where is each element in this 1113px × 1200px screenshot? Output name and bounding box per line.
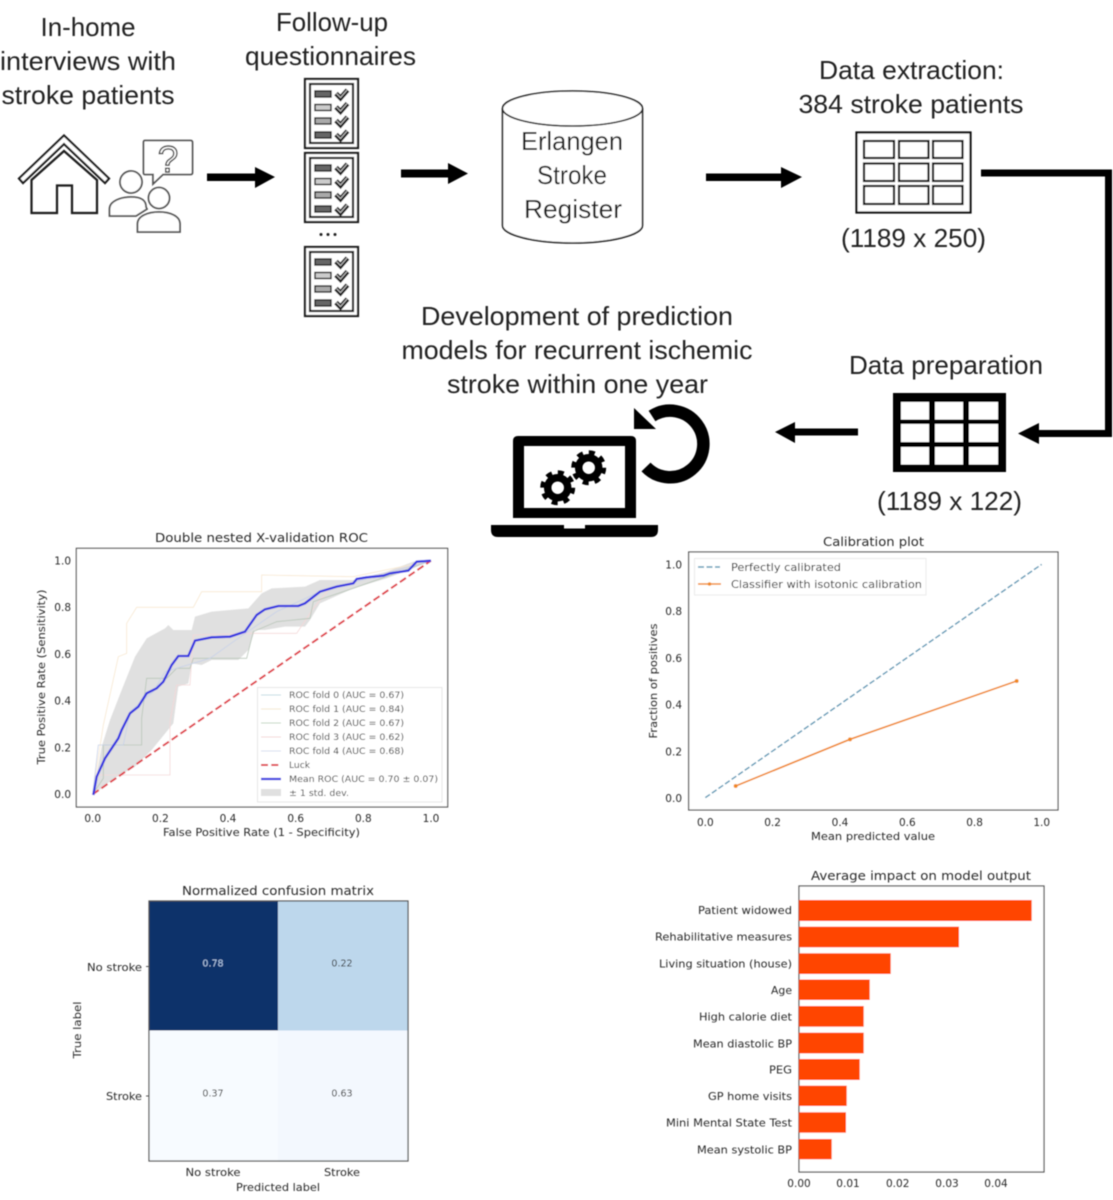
calibration y tick labels: 0.8 [665,606,682,618]
ROC x tick labels: 1.0 [423,813,439,825]
confusion matrix cells: 0.63 [331,1088,353,1100]
confusion matrix cells [149,901,408,1161]
feature labels: Mini Mental State Test [666,1118,792,1130]
feature labels: GP home visits [708,1091,792,1103]
ROC plot area [76,548,448,807]
chart title: confusion matrix: Normalized confusion matrix [182,884,374,898]
bars x tick labels: 0.02 [886,1178,909,1190]
calibration y axis label: Fraction of positives [648,624,660,738]
heading: in-home interviews: interviews with [0,46,176,76]
calibration x tick labels [697,817,1050,829]
chart title: calibration: Calibration plot [823,535,924,549]
feature labels: Rehabilitative measures [655,932,792,944]
ROC x tick labels: 0.6 [287,813,304,825]
feature labels: Age [771,985,792,997]
heading: data preparation: Data preparation [849,350,1043,380]
heading: development of prediction models: Development of prediction [421,301,733,331]
feature labels: Living situation (house) [659,958,792,970]
perfectly calibrated line [705,564,1042,798]
calibration y tick labels [665,560,682,805]
heading: data extraction: 384 stroke patients [798,89,1024,119]
calibration x tick labels: 1.0 [1033,817,1050,829]
heading: follow-up questionnaires [245,7,416,71]
heading: follow-up questionnaires: questionnaires [245,41,416,71]
icon: Erlangen Stroke Register database: Erlangen [521,126,623,156]
icon: gear large [574,453,604,483]
ROC legend: ROC fold 4 (AUC = 0.68) [289,747,404,757]
bars x tick labels: 0.00 [787,1178,811,1190]
calibration y tick labels: 0.4 [665,700,682,712]
std dev band [93,561,431,795]
ROC legend: Mean ROC (AUC = 0.70 ± 0.07) [289,775,438,785]
bars x tick labels: 0.04 [984,1178,1008,1190]
icon: Erlangen Stroke Register database: Register [524,194,622,224]
confusion x tick labels: No stroke [186,1167,240,1179]
feature labels: Patient widowed [698,905,792,917]
chart: ROC curve [36,531,448,839]
bars x tick labels: 0.03 [935,1178,959,1190]
calibration y tick labels: 0.6 [665,653,682,665]
bars x tick labels: 0.01 [836,1178,860,1190]
confusion matrix cells: 0.22 [331,958,353,970]
arrow: interviews to questionnaires [207,167,275,188]
icon: house [19,136,109,213]
ROC legend: Luck [289,761,310,771]
heading: development of prediction models: models for recurrent ischemic [402,335,752,365]
bars frame [799,886,1044,1172]
arrow: preparation to modelling [775,422,858,443]
heading: data extraction: Data extraction: [819,55,1004,85]
ROC x tick labels: 0.2 [152,813,169,825]
ROC y tick labels: 0.6 [54,649,71,661]
feature labels [655,905,792,1156]
heading: follow-up questionnaires: Follow-up [276,7,388,37]
ROC y tick labels: 1.0 [54,556,71,568]
ROC legend: ROC fold 3 (AUC = 0.62) [289,733,404,743]
feature labels: High calorie diet [699,1012,792,1024]
calibration y tick labels: 0.0 [665,793,682,805]
ROC y tick labels: 0.4 [54,696,71,708]
icon: circular iteration arrow [634,408,703,477]
confusion y tick labels [87,962,149,1103]
chart: feature importance bars [655,869,1044,1190]
heading: development of prediction models: stroke within one year [447,369,708,399]
ROC y tick labels: 0.2 [54,742,71,754]
confusion x axis label: Predicted label [236,1182,320,1194]
arrow: register to data extraction [706,167,802,188]
ROC x axis label: False Positive Rate (1 - Specificity) [163,827,360,839]
arrow: extraction to preparation [981,170,1112,444]
label: raw data dimensions: (1189 x 250) [841,223,986,253]
ROC x tick labels [84,813,439,825]
bars x tick labels [787,1178,1008,1190]
confusion matrix cells: 0.78 [202,958,224,970]
workflow diagram [0,7,1112,537]
chart: confusion matrix [72,884,408,1194]
bars [799,900,1032,1159]
chart: calibration plot [648,535,1058,843]
ROC x tick labels: 0.8 [355,813,372,825]
heading: in-home interviews [0,12,176,110]
ROC legend: ROC fold 0 (AUC = 0.67) [289,691,404,701]
heading: in-home interviews: In-home [40,12,136,42]
chart title: average impact: Average impact on model output [811,869,1031,883]
label: prepared data dimensions: (1189 x 122) [877,486,1022,516]
icon: questionnaire stack [305,79,358,316]
confusion matrix cells: 0.37 [202,1088,224,1100]
confusion x tick labels [186,1167,360,1179]
ROC y axis label: True Positive Rate (Sensitivity) [36,590,48,766]
isotonic calibration line [734,679,1019,788]
luck diagonal [93,561,431,794]
icon: laptop with gears [491,436,658,537]
fold curves [93,561,431,794]
calibration plot area [689,552,1058,810]
icon: gear small [543,473,573,503]
calibration y tick labels: 0.2 [665,746,682,758]
calibration x tick labels: 0.0 [697,817,714,829]
mean ROC curve [93,561,431,795]
ROC legend: ROC fold 1 (AUC = 0.84) [289,705,404,715]
icon: raw data table [856,132,970,212]
calibration x tick labels: 0.2 [764,817,781,829]
ROC legend [258,688,442,802]
arrow: questionnaires to register [401,163,468,184]
ROC legend: ROC fold 2 (AUC = 0.67) [289,719,404,729]
confusion y tick labels: Stroke [106,1091,142,1103]
ROC legend: ± 1 std. dev. [289,789,349,799]
confusion y tick labels: No stroke [87,962,142,974]
heading: in-home interviews: stroke patients [2,80,174,110]
calibration legend: Classifier with isotonic calibration [731,579,922,591]
calibration legend: Perfectly calibrated [731,562,841,574]
icon: prepared data table [893,393,1006,472]
heading: data extraction [798,55,1024,119]
feature labels: Mean diastolic BP [693,1038,792,1050]
feature labels: PEG [769,1064,792,1076]
ROC x tick labels: 0.4 [220,813,237,825]
ROC y tick labels [54,556,71,801]
calibration x tick labels: 0.4 [832,817,849,829]
calibration x tick labels: 0.6 [899,817,916,829]
ROC x tick labels: 0.0 [84,813,101,825]
calibration x tick labels: 0.8 [966,817,983,829]
calibration legend [694,558,926,595]
confusion y axis label: True label [72,1001,84,1060]
ROC y tick labels: 0.8 [54,602,71,614]
chart title: ROC: Double nested X-validation ROC [155,531,368,545]
feature labels: Mean systolic BP [697,1144,792,1156]
confusion x tick labels: Stroke [324,1167,360,1179]
calibration y tick labels: 1.0 [665,560,682,572]
heading: development of prediction models [402,301,752,399]
calibration x axis label: Mean predicted value [811,831,935,843]
ROC y tick labels: 0.0 [54,789,71,801]
icon: two people with question bubble [110,139,192,232]
icon: Erlangen Stroke Register database [502,91,642,243]
icon: Erlangen Stroke Register database: Stroke [537,160,607,190]
icon: two people with question bubble: ? [158,139,178,180]
